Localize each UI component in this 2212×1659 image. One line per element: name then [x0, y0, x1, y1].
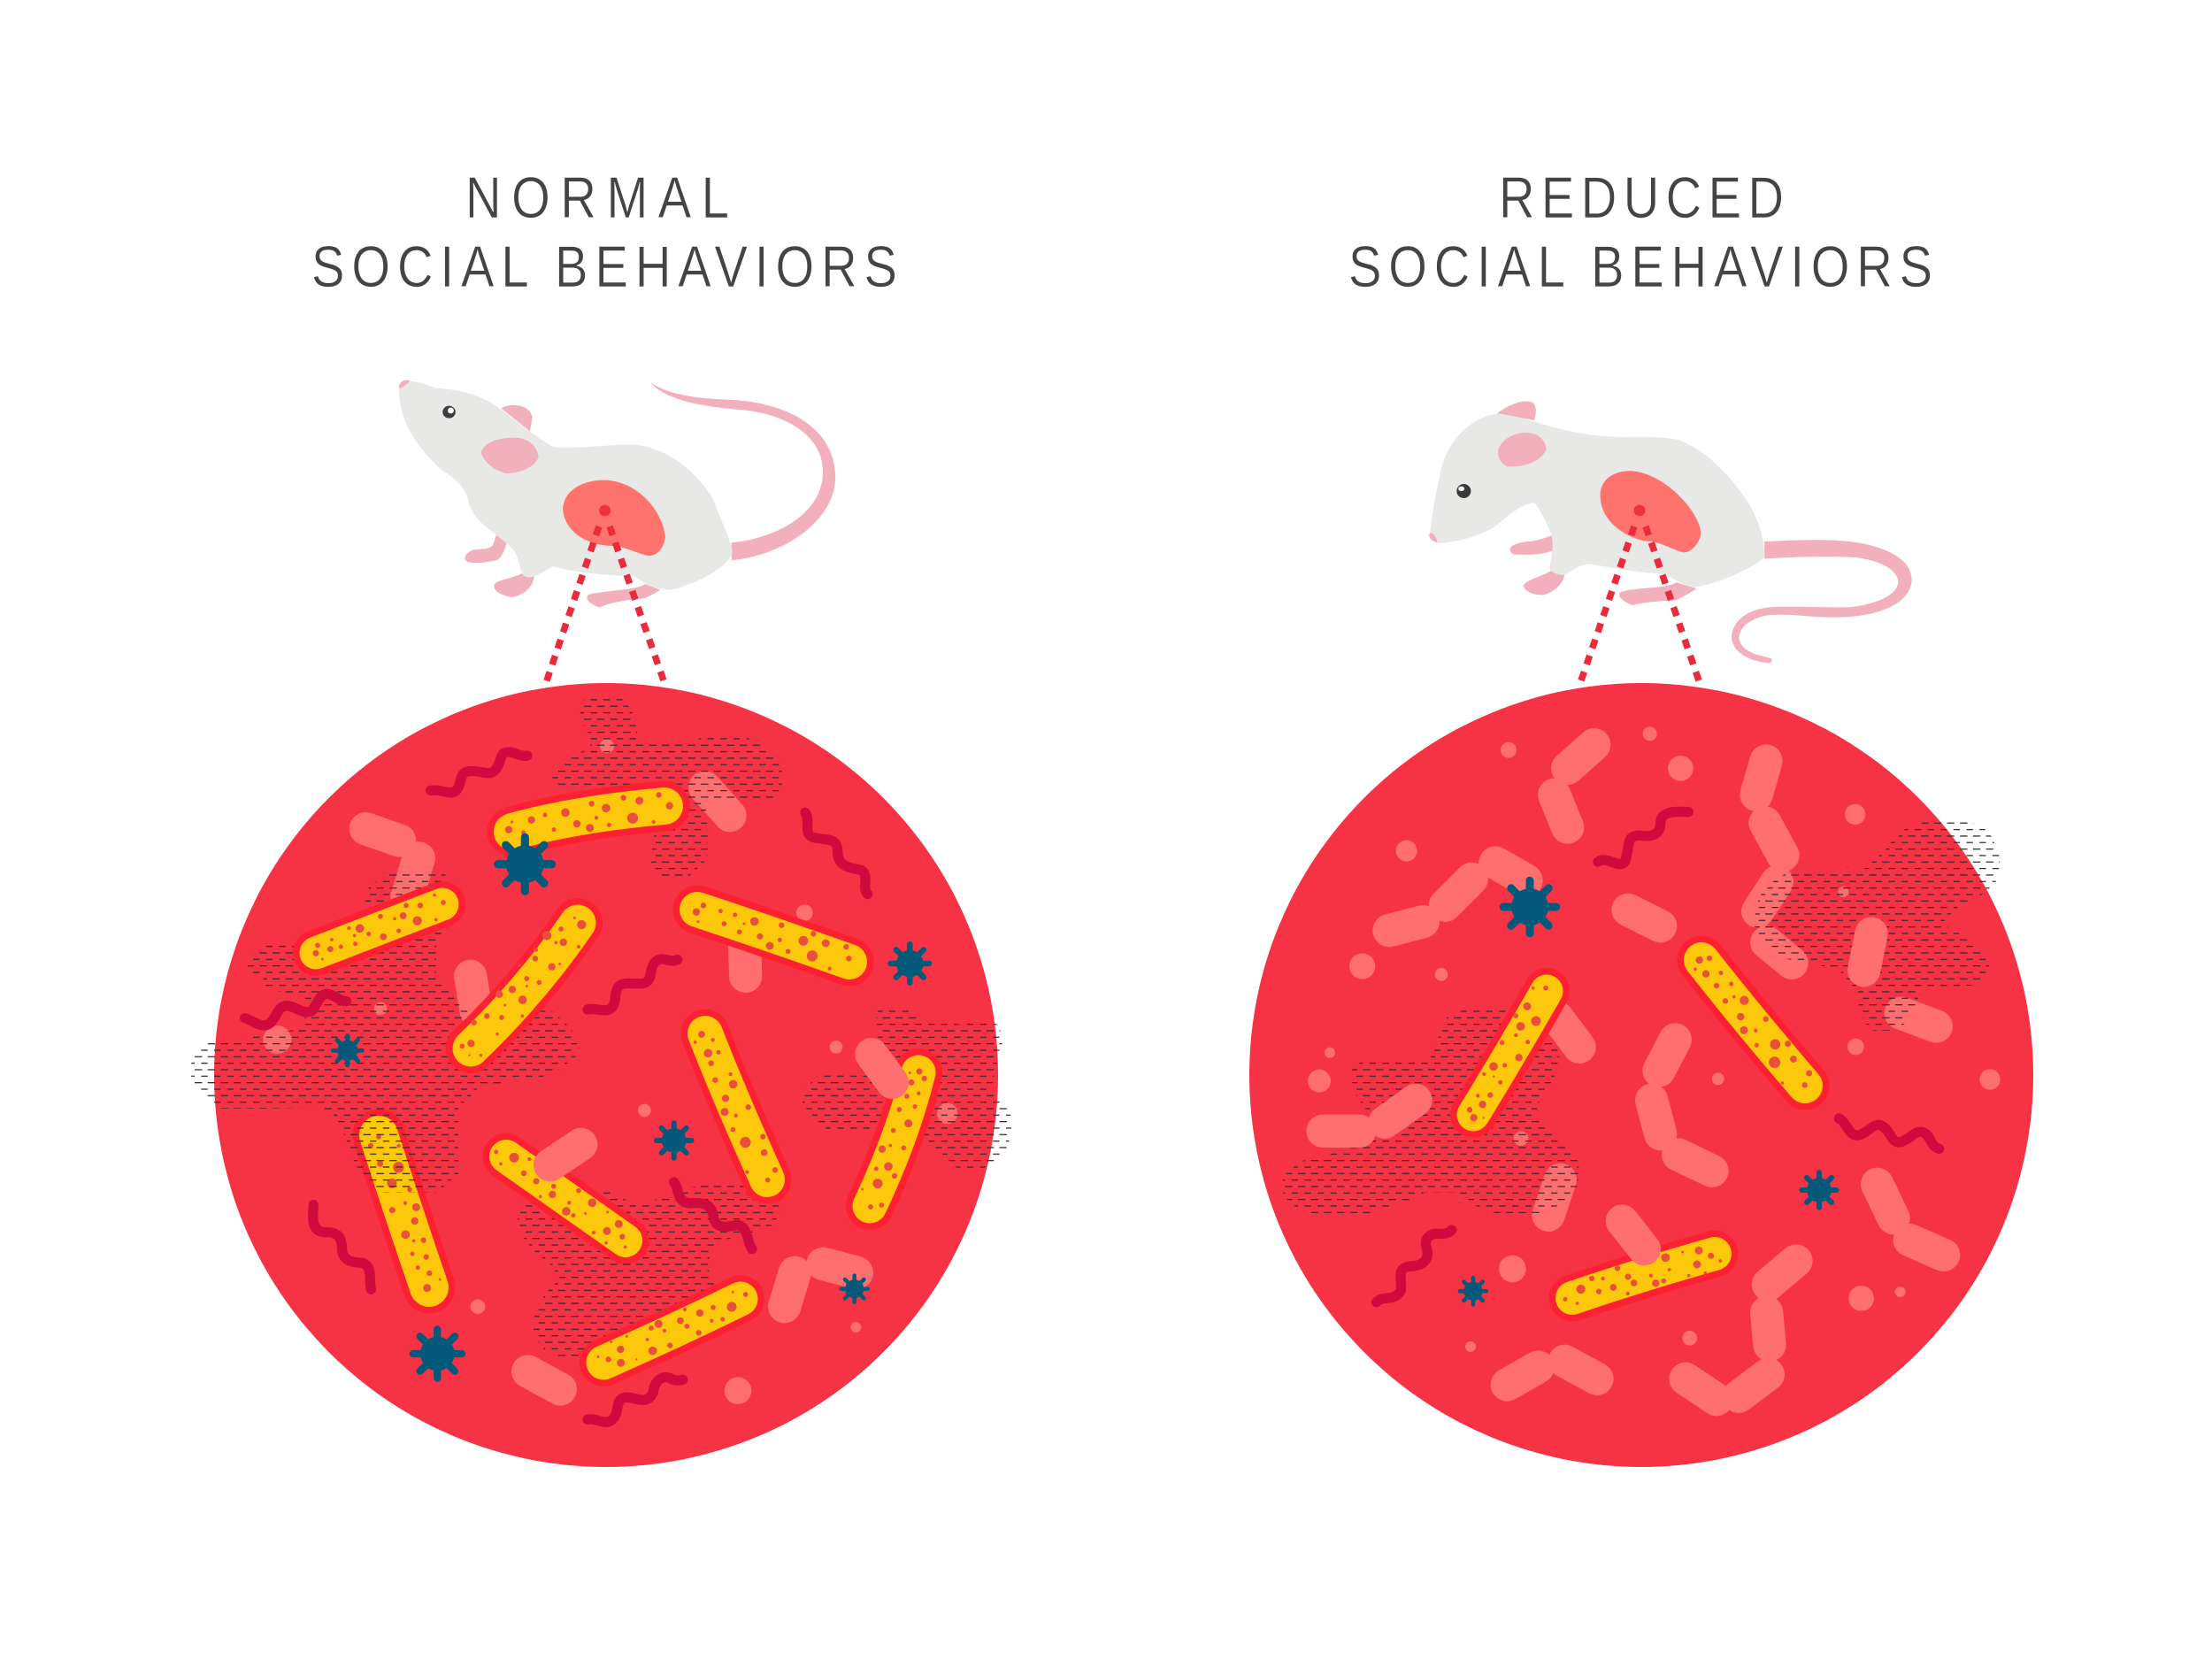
bacterium 6: [862, 1069, 926, 1209]
heading: normal social behaviors: NORMAL: [465, 165, 729, 230]
panel: normal microbiome circle: [190, 683, 1011, 1467]
pale dots: [263, 739, 957, 1404]
blue viruses: [333, 837, 929, 1379]
pale bacteria under layer: [365, 787, 746, 1011]
bacterium B: [1694, 956, 1812, 1087]
mouse body: [1430, 413, 1764, 587]
panel: reduced microbiome circle: [1249, 683, 2033, 1467]
zoom origin dot: [599, 505, 611, 516]
mouse near ear: [1498, 433, 1546, 466]
heading: reduced social behaviors: [1348, 165, 1932, 299]
hatched clouds: [1283, 822, 2000, 1213]
dark red worms: [245, 752, 868, 1422]
bacterium A: [1467, 986, 1548, 1121]
yellow bacteria: [1467, 956, 1812, 1304]
mouse tail: [1732, 540, 1912, 663]
mouse near ear: [481, 438, 539, 473]
panel: normal mouse: [399, 380, 835, 608]
mouse nose: [1429, 533, 1438, 542]
pale bacteria top layer: [528, 1055, 892, 1389]
bacterium 4: [693, 903, 851, 970]
yellow bacteria: [313, 793, 926, 1366]
bacterium 3: [460, 917, 586, 1056]
bacterium C: [1563, 1247, 1722, 1304]
pale bacteria under hatching: [1548, 882, 1936, 1215]
mouse feet: [1509, 534, 1697, 605]
mouse far ear: [501, 405, 533, 431]
heading: reduced social behaviors: SOCIAL BEHAVIORS: [1348, 234, 1932, 299]
dark red worms: [1377, 811, 1939, 1302]
bacterium 5: [694, 1032, 778, 1182]
gut highlight: [563, 480, 665, 556]
pale bacteria top layer: [1323, 745, 1944, 1400]
bacterium 1: [505, 793, 672, 834]
mouse far ear: [1497, 401, 1536, 420]
zoom lines: normal: [546, 526, 664, 683]
heading: normal social behaviors: [311, 165, 897, 299]
gut highlight: [1601, 471, 1701, 552]
mouse feet: [465, 535, 660, 608]
heading: reduced social behaviors: REDUCED: [1499, 165, 1784, 230]
circle background: [1249, 683, 2033, 1467]
hatched clouds: [190, 695, 1011, 1363]
mouse eye: [442, 406, 456, 419]
mouse tail: [650, 382, 835, 560]
zoom origin dot: [1633, 505, 1645, 516]
blue viruses: [1460, 880, 1837, 1304]
mouse nose: [399, 380, 410, 388]
heading: normal social behaviors: SOCIAL BEHAVIORS: [311, 234, 897, 299]
bacterium 2: [313, 894, 445, 960]
bacterium 9: [597, 1291, 748, 1366]
yellow bacterium under hatching: [368, 1135, 441, 1292]
bacterium 8: [495, 1150, 626, 1248]
circle background: [214, 683, 998, 1467]
mouse eye: [1456, 484, 1471, 498]
panel: reduced mouse: [1429, 401, 1912, 663]
pale dots: [1308, 726, 2001, 1352]
mouse body: [399, 381, 733, 590]
zoom lines: reduced: [1580, 526, 1700, 683]
